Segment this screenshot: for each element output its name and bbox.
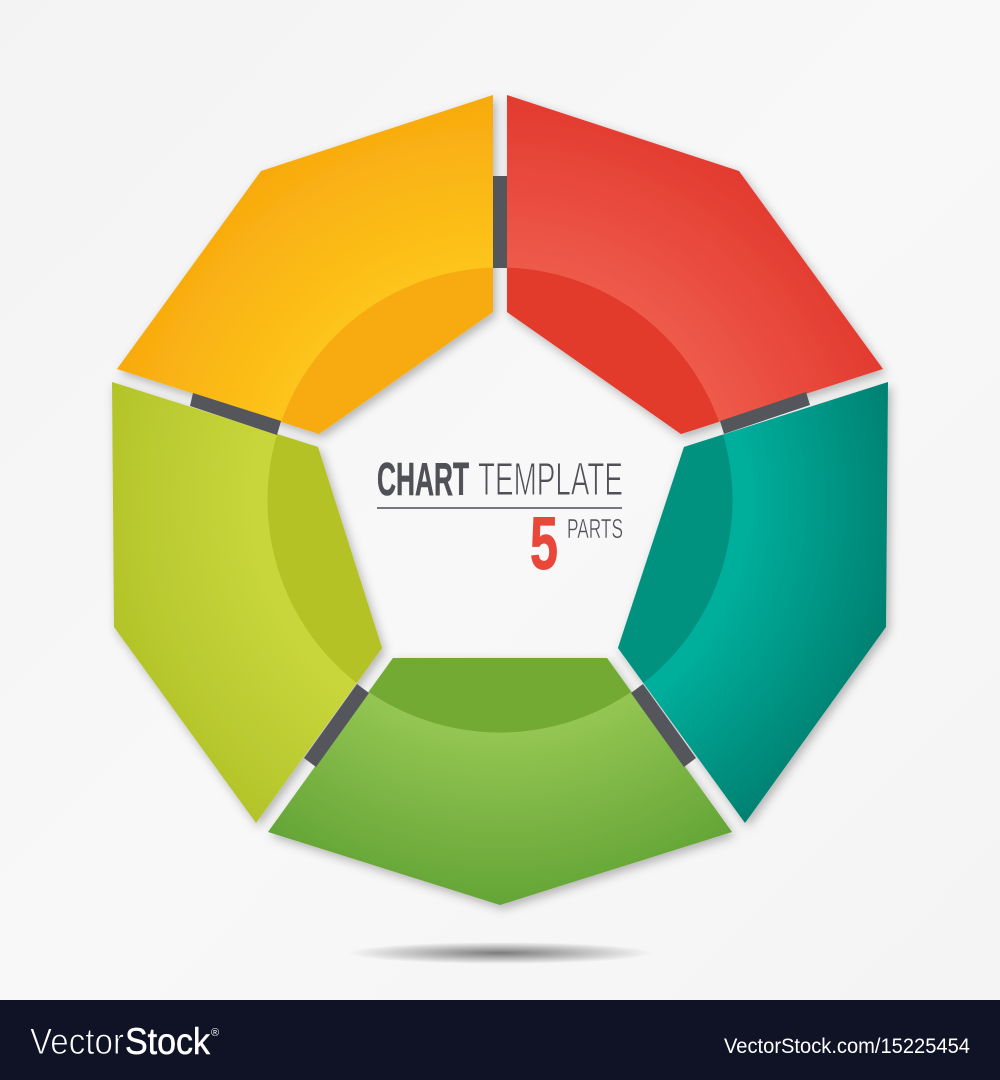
center title: CHART — [377, 453, 469, 505]
connector: left — [190, 393, 281, 435]
footer logo: Stock — [125, 1021, 210, 1062]
connector: top — [493, 176, 507, 268]
title rule — [377, 507, 622, 509]
segment: red — [504, 95, 888, 442]
number 5: 5 — [530, 502, 558, 585]
segment: teal — [617, 382, 896, 829]
footer logo: ® — [211, 1027, 219, 1039]
footer logo: Vector — [30, 1021, 124, 1062]
connector: bottom right — [631, 684, 696, 767]
connector: bottom left — [304, 684, 369, 767]
connector: right — [720, 392, 810, 434]
segment: lime — [110, 382, 389, 829]
ground shadow — [348, 942, 652, 964]
center title — [377, 453, 623, 505]
segment: green — [268, 656, 737, 914]
parts label: PARTS — [567, 513, 623, 544]
footer logo — [30, 1021, 219, 1062]
segment: yellow — [117, 95, 502, 442]
footer bar — [0, 1000, 1000, 1080]
footer id text: VectorStock.com/15225454 — [724, 1035, 970, 1058]
center title: TEMPLATE — [478, 453, 623, 505]
